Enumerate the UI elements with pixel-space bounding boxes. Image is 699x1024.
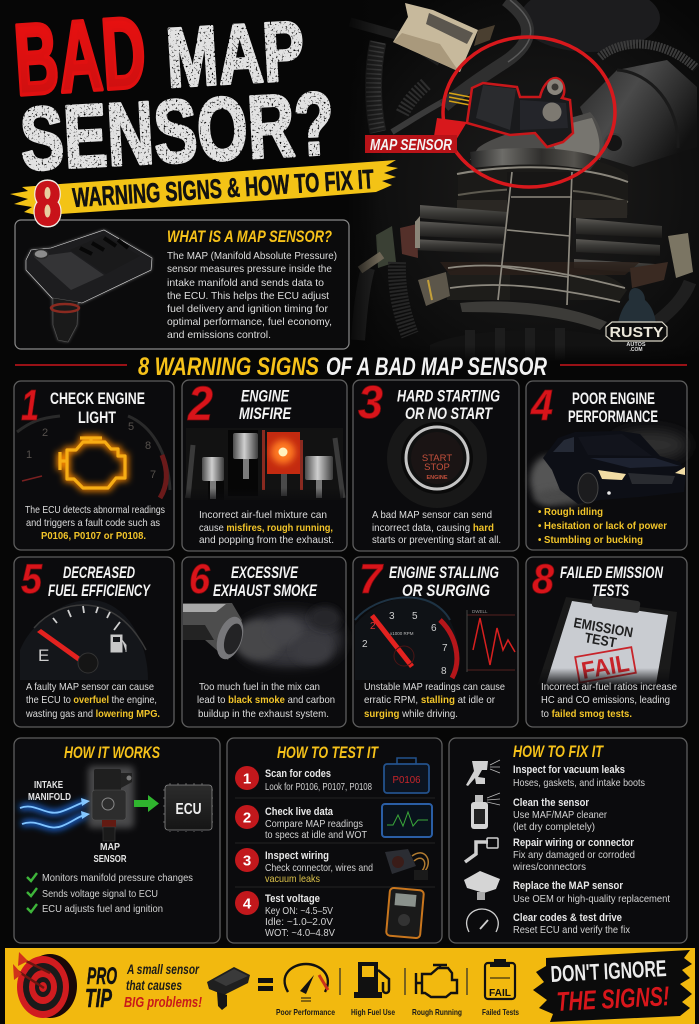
checklist: Sends voltage signal to ECU	[42, 889, 158, 900]
diagram: ECU chip	[163, 783, 213, 832]
fix 5: clear codes: Reset ECU and verify the fix	[513, 925, 630, 936]
checklist: Monitors manifold pressure changes	[42, 873, 193, 884]
panel: what is a MAP sensor	[15, 220, 349, 349]
image: clipboard with emission test fail: EMISSION	[572, 614, 634, 640]
description: A bad MAP sensor can send	[372, 509, 492, 521]
icon: engine, rough running: Rough Running	[412, 1007, 462, 1017]
fix 5: clear codes: Clear codes & test drive	[513, 912, 622, 924]
panel: 5 decreased fuel efficiency	[14, 555, 174, 727]
text: MAP sensor explanation: fuel delivery and ignition timing for	[167, 303, 328, 315]
title: CHECK ENGINE	[50, 390, 145, 408]
step 3: inspect wiring: vacuum leaks	[265, 874, 320, 885]
description: and triggers a fault code such as	[26, 517, 160, 529]
arrow: green to ECU	[134, 795, 159, 812]
title	[50, 390, 145, 427]
description: Incorrect air-fuel ratios increase	[541, 681, 677, 693]
fix 3: repair wiring: wires/connectors	[512, 862, 586, 873]
title: OR NO START	[405, 405, 493, 423]
title: LIGHT	[78, 409, 116, 427]
image: tachometer and RPM graph: 3	[389, 611, 395, 622]
text: MAP sensor explanation: sensor measures pressure inside the	[167, 263, 332, 275]
icon: fuel pump, high fuel use: High Fuel Use	[351, 1007, 395, 1017]
panel: 3 hard starting	[353, 376, 519, 551]
fix 1: vacuum leaks	[466, 760, 645, 789]
text: MAP sensor explanation: and emissions control.	[167, 329, 271, 341]
title	[239, 388, 292, 423]
title: TESTS	[592, 582, 629, 600]
title: HARD STARTING	[397, 388, 500, 406]
badge: red 8: 8	[36, 174, 59, 234]
image: tachometer and RPM graph: 7	[442, 643, 448, 654]
text: MAP sensor explanation: The MAP (Manifold Absolute Pressure)	[167, 250, 337, 262]
image: pistons with misfire flash	[186, 428, 343, 504]
step 1: scan for codes: Scan for codes	[265, 768, 331, 780]
bullet list: • Stumbling or bucking	[538, 534, 643, 546]
label: intake manifold: INTAKE	[34, 780, 63, 791]
paper tag with barcode	[393, 3, 495, 72]
panel: 4 poor engine performance	[526, 381, 688, 550]
icon: clipboard, failed tests: Failed Tests	[482, 1007, 519, 1017]
image: start stop button: ENGINE	[426, 475, 448, 481]
text: MAP sensor explanation: optimal performance, fuel economy,	[167, 316, 332, 328]
title	[568, 390, 658, 426]
image: tachometer and RPM graph: 2	[370, 621, 376, 632]
text: small sensor big problems: BIG problems!	[124, 995, 202, 1011]
title	[48, 564, 151, 600]
icon: gauge, poor performance: Poor Performance	[276, 1007, 335, 1017]
description	[197, 681, 335, 720]
text: small sensor big problems: A small sensor	[126, 962, 200, 977]
description: the ECU to overfuel the engine,	[26, 694, 157, 706]
step 4: test voltage: 4	[243, 896, 252, 912]
title	[397, 388, 500, 423]
title: MISFIRE	[239, 405, 292, 423]
heading: HOW TO FIX IT	[513, 742, 604, 761]
label: intake manifold: MANIFOLD	[28, 792, 71, 803]
fix 4: replace the sensor: Use OEM or high-quality replacement	[513, 894, 670, 905]
icon: MAP sensor photo	[26, 230, 152, 342]
title: BAD MAP SENSOR?: MAP	[164, 3, 307, 105]
title: OR SURGING	[402, 582, 490, 600]
step 3: inspect wiring	[235, 848, 428, 885]
description: surging while driving.	[364, 708, 458, 720]
number 5: 5	[21, 555, 43, 602]
step 2: check live data: Compare MAP readings	[265, 819, 363, 830]
image: tachometer and RPM graph	[355, 597, 515, 680]
step 2: check live data: to specs at idle and WOT	[265, 830, 367, 841]
image: black car with smoke	[530, 430, 688, 505]
panel: how to test it	[227, 738, 442, 943]
panel: 6 excessive exhaust smoke	[182, 555, 346, 727]
description: to failed smog tests.	[541, 708, 632, 720]
heading: 8 warning signs of a bad MAP sensor	[15, 353, 687, 381]
fix 3: repair wiring: Repair wiring or connector	[513, 837, 635, 849]
description	[25, 504, 165, 542]
step 4: test voltage	[235, 888, 424, 939]
image: tachometer and RPM graph: 2	[362, 639, 368, 650]
description	[199, 509, 334, 546]
number 6: 6	[189, 555, 211, 602]
image: clipboard with emission test fail: TEST	[583, 629, 618, 651]
fix 5: clear codes	[467, 909, 630, 936]
photo: MAP sensor with red highlight circle	[443, 37, 615, 187]
fix 3: repair wiring	[465, 837, 635, 873]
label: MAP sensor: SENSOR	[94, 854, 127, 865]
description: Incorrect air-fuel mixture can	[199, 509, 327, 521]
title: FUEL EFFICIENCY	[48, 582, 151, 600]
title: ENGINE STALLING	[389, 564, 499, 582]
description	[364, 681, 505, 720]
image: exhaust pipe with black smoke	[183, 603, 344, 679]
heading: what is a MAP sensor: WHAT IS A MAP SENSOR?	[167, 227, 332, 246]
title: BAD MAP SENSOR?	[11, 0, 337, 189]
photo: engine bay with intake and hoses	[345, 0, 699, 362]
step 4: test voltage: Test voltage	[265, 893, 320, 905]
text: pro tip	[85, 963, 117, 1013]
image: dashboard with check engine icon	[17, 416, 170, 498]
image: dashboard with check engine icon: 5	[128, 421, 134, 433]
icon: fuel pump, high fuel use	[351, 962, 395, 1017]
fix 1: vacuum leaks: Inspect for vacuum leaks	[513, 764, 625, 776]
icon: equals sign	[258, 978, 273, 991]
heading: HOW TO TEST IT	[277, 743, 379, 762]
panel: how it works	[14, 738, 220, 943]
logo: Rusty Autos: RUSTY	[610, 324, 664, 341]
image: fuel gauge on empty: E	[38, 646, 49, 665]
fix 4: replace the sensor	[464, 871, 670, 905]
icon: clipboard, failed tests	[482, 959, 519, 1017]
image: dashboard with check engine icon: 8	[145, 440, 151, 452]
fix 1: vacuum leaks: Hoses, gaskets, and intake boots	[513, 778, 645, 789]
icon: target with arrows	[13, 952, 77, 1018]
text: small sensor big problems: that causes	[126, 978, 182, 993]
image: tachometer and RPM graph: 6	[431, 623, 437, 634]
title: POOR ENGINE	[572, 390, 655, 408]
title: BAD MAP SENSOR?: SENSOR?	[18, 73, 337, 189]
text: MAP sensor explanation: intake manifold and sends data to	[167, 277, 324, 289]
image: dashboard with check engine icon: 1	[26, 449, 32, 461]
step 1: scan for codes: 1	[243, 770, 251, 788]
title: EXCESSIVE	[231, 564, 299, 582]
description: starts or preventing start at all.	[372, 534, 501, 546]
text: pro tip: TIP	[85, 983, 112, 1013]
panel: 8 failed emission tests	[526, 555, 687, 727]
number 7: 7	[359, 555, 384, 602]
description	[541, 681, 677, 720]
description	[372, 509, 501, 546]
description: buildup in the exhaust system.	[198, 708, 329, 720]
fix 2: clean the sensor: Use MAF/MAP cleaner	[513, 810, 608, 821]
number 2: 2	[187, 378, 213, 431]
description: The ECU detects abnormal readings	[25, 504, 165, 516]
number 8: 8	[532, 555, 555, 602]
description: and popping from the exhaust.	[199, 534, 334, 546]
description	[25, 681, 160, 720]
image: start stop button: START	[422, 453, 452, 464]
description: P0106, P0107 or P0108.	[41, 530, 146, 542]
image: tachometer and RPM graph: DWELL	[472, 609, 488, 614]
label: intake manifold	[28, 780, 71, 803]
image: tachometer and RPM graph: x1000 RPM	[390, 631, 414, 636]
step 3: inspect wiring: 3	[243, 852, 251, 870]
icon: engine, rough running	[412, 965, 462, 1017]
bullet list: • Rough idling	[538, 506, 603, 518]
step 1: scan for codes: Look for P0106, P0107, P0108	[265, 782, 372, 793]
icon: gauge, poor performance	[276, 964, 335, 1017]
icon: clipboard, failed tests: FAIL	[489, 988, 511, 999]
image: clipboard with emission test fail	[530, 595, 684, 686]
banner: warning signs and how to fix it: WARNING SIGNS & HOW TO FIX IT	[71, 164, 375, 213]
number 3: 3	[358, 376, 383, 428]
panel: 1 check engine light	[14, 381, 174, 550]
badge: red 8: 8	[36, 174, 59, 234]
fix 2: clean the sensor: (let dry completely)	[513, 822, 595, 833]
image: fuel gauge on empty	[20, 600, 148, 680]
label: MAP sensor: MAP	[100, 842, 120, 853]
text: pro tip: PRO	[87, 963, 117, 990]
step 4: test voltage: WOT: ~4.0–4.8V	[265, 928, 335, 939]
checklist	[27, 873, 193, 915]
image: tachometer and RPM graph: 8	[441, 666, 447, 677]
logo: Rusty Autos: AUTOS	[626, 342, 646, 348]
panel: 2 engine misfire	[182, 378, 347, 551]
description: wasting gas and lowering MPG.	[25, 708, 160, 720]
title	[389, 564, 499, 600]
step 2: check live data: Check live data	[265, 806, 334, 818]
description: erratic RPM, stalling at idle or	[364, 694, 495, 706]
diagram: blue air flow	[20, 798, 90, 828]
number 1: 1	[21, 381, 39, 430]
description: HC and CO emissions, leading	[541, 694, 670, 706]
callout: MAP SENSOR label with arrow: MAP SENSOR	[370, 137, 453, 154]
image: clipboard with emission test fail: FAIL	[579, 650, 631, 685]
bullet list	[538, 506, 667, 546]
image: tachometer and RPM graph: 5	[412, 611, 418, 622]
description: Unstable MAP readings can cause	[364, 681, 505, 693]
number 4: 4	[530, 381, 553, 430]
step 2: check live data	[235, 804, 432, 841]
checklist: ECU adjusts fuel and ignition	[42, 904, 163, 915]
fix 4: replace the sensor: Replace the MAP sensor	[513, 880, 624, 892]
logo: Rusty Autos	[606, 288, 667, 353]
logo: Rusty Autos: .COM	[629, 347, 643, 353]
description: lead to black smoke and carbon	[197, 694, 335, 706]
icon: small MAP sensor	[207, 967, 250, 1010]
image: start stop button: STOP	[424, 462, 450, 473]
banner: warning signs and how to fix it	[10, 160, 398, 216]
title	[213, 564, 318, 600]
text: MAP sensor explanation	[167, 250, 337, 341]
step 3: inspect wiring: Check connector, wires and	[265, 863, 373, 874]
step 1: scan for codes: P0106	[392, 774, 421, 786]
banner: pro tip	[5, 948, 695, 1024]
title: PERFORMANCE	[568, 408, 658, 426]
image: dashboard with check engine icon: 7	[150, 469, 156, 481]
step 4: test voltage: Key ON: ~4.5–5V	[265, 906, 333, 917]
step 3: inspect wiring: Inspect wiring	[265, 850, 329, 862]
text: small sensor big problems	[124, 962, 202, 1011]
panel: 7 engine stalling or surging	[353, 555, 518, 727]
step 2: check live data: 2	[243, 810, 251, 826]
fix 2: clean the sensor	[471, 793, 608, 833]
fix 2: clean the sensor: Clean the sensor	[513, 797, 590, 809]
heading: 8 warning signs of a bad MAP sensor: OF A BAD MAP SENSOR	[326, 353, 547, 381]
diagram: ECU chip: ECU	[176, 801, 202, 818]
description: cause misfires, rough running,	[199, 522, 333, 534]
callout: don't ignore the signs	[533, 950, 692, 1022]
callout: MAP SENSOR label with arrow	[365, 118, 467, 154]
title: ENGINE	[241, 388, 290, 406]
title: EXHAUST SMOKE	[213, 582, 318, 600]
bullet list: • Hesitation or lack of power	[538, 520, 667, 532]
description: incorrect data, causing hard	[372, 522, 494, 534]
heading: HOW IT WORKS	[64, 743, 160, 762]
text: MAP sensor explanation: the ECU. This helps the ECU adjust	[167, 290, 329, 302]
step 4: test voltage: Idle: ~1.0–2.0V	[265, 917, 333, 928]
fix 3: repair wiring: Fix any damaged or corroded	[513, 850, 635, 861]
label: MAP sensor	[94, 842, 127, 865]
title	[560, 564, 664, 600]
diagram: MAP sensor	[88, 766, 134, 841]
description: A faulty MAP sensor can cause	[26, 681, 154, 693]
image: start stop button	[387, 408, 487, 508]
description: Too much fuel in the mix can	[199, 681, 320, 693]
heading: 8 warning signs of a bad MAP sensor: 8 WARNING SIGNS	[138, 353, 319, 381]
title: DECREASED	[63, 564, 135, 582]
step 1: scan for codes	[235, 758, 429, 793]
panel: how to fix it	[449, 738, 687, 943]
image: dashboard with check engine icon: 2	[42, 427, 48, 439]
